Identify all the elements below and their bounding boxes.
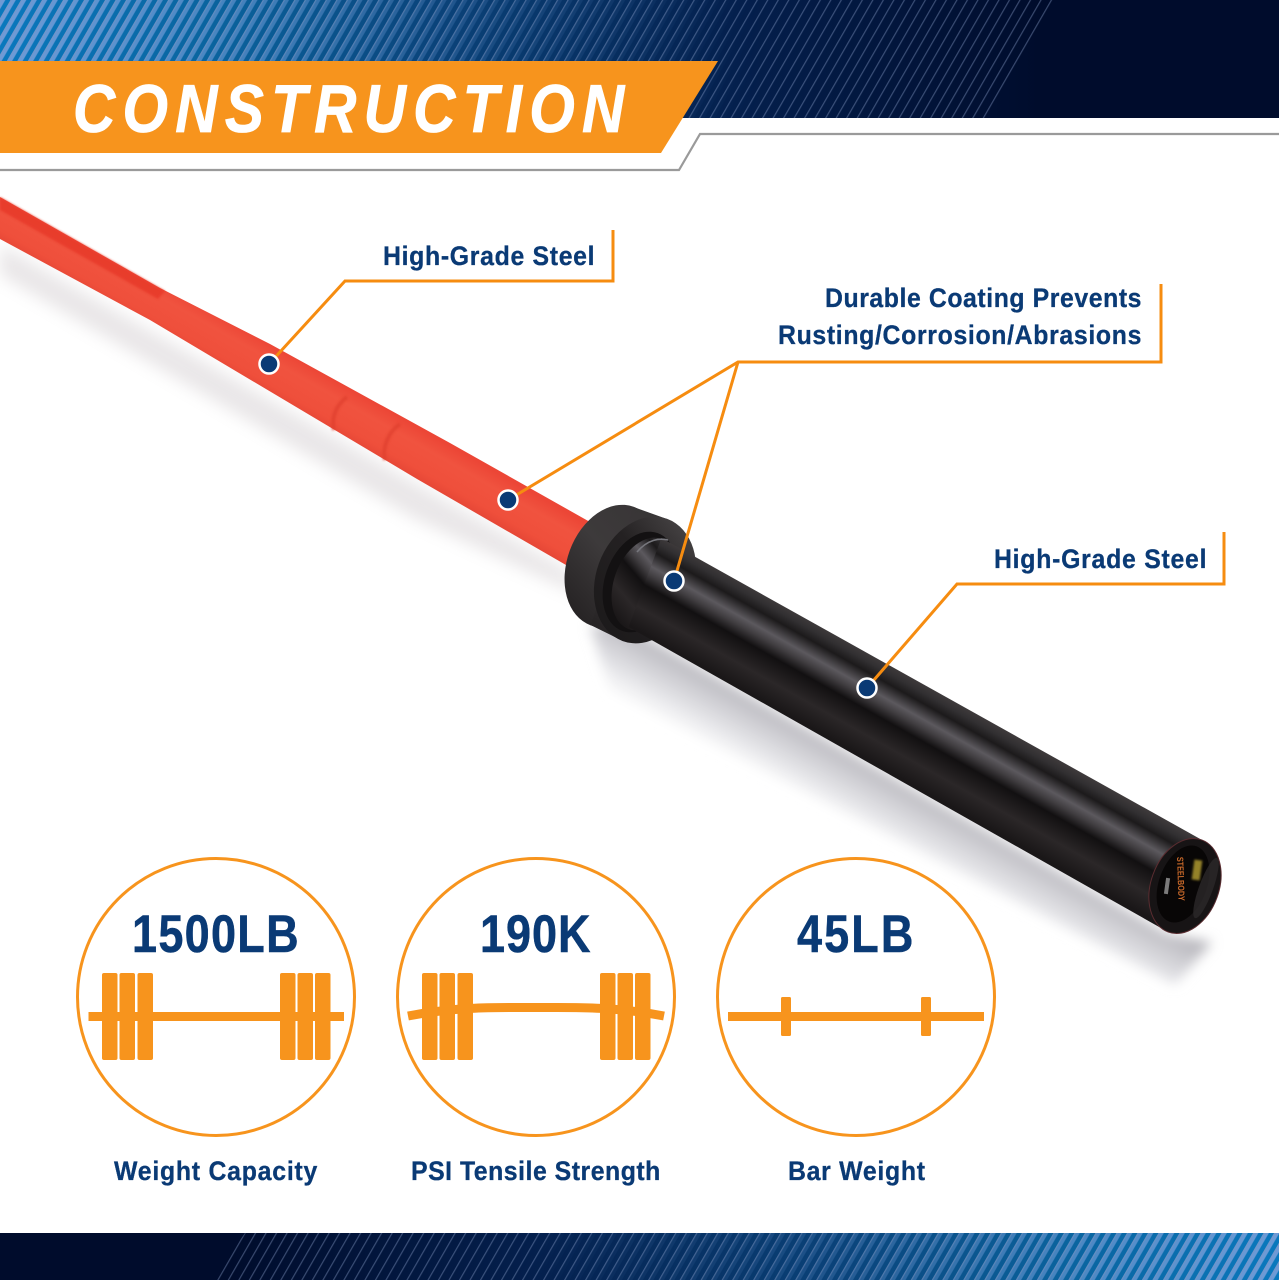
sleeve shadow bbox=[590, 625, 1212, 985]
value: 45LB bbox=[797, 905, 913, 964]
marker on shaft bbox=[498, 490, 518, 510]
sleeve end cap bbox=[1136, 828, 1234, 944]
label bbox=[778, 284, 1141, 350]
black sleeve bbox=[599, 528, 1202, 932]
marker bbox=[260, 354, 278, 374]
icon: empty bar bbox=[728, 997, 984, 1036]
value: 190K bbox=[480, 905, 591, 964]
title banner bbox=[0, 61, 718, 153]
collar bbox=[548, 491, 713, 658]
label: Rusting/Corrosion/Abrasions bbox=[778, 321, 1141, 350]
icon: bending loaded barbell bbox=[408, 973, 664, 1060]
label: High-Grade Steel bbox=[994, 545, 1207, 574]
knurl grooves bbox=[333, 397, 347, 430]
caption: Bar Weight bbox=[788, 1157, 925, 1186]
end cap lettering: STEELBODY bbox=[1175, 857, 1187, 901]
callout: durable coating bbox=[498, 284, 1161, 590]
caption: PSI Tensile Strength bbox=[411, 1157, 660, 1186]
stat: bar weight bbox=[718, 858, 994, 1186]
stat: tensile strength bbox=[398, 858, 674, 1186]
bottom striped banner bbox=[0, 1233, 1279, 1280]
label: Durable Coating Prevents bbox=[825, 284, 1141, 313]
title: CONSTRUCTION bbox=[73, 72, 625, 147]
stat: weight capacity bbox=[78, 858, 354, 1186]
label: High-Grade Steel bbox=[383, 242, 595, 271]
callout: high-grade steel, sleeve bbox=[858, 532, 1224, 698]
marker on sleeve bbox=[664, 572, 684, 590]
white page area under the banner step bbox=[0, 118, 1279, 170]
marker bbox=[858, 678, 876, 698]
barbell photo illustration bbox=[0, 197, 1234, 985]
value: 1500LB bbox=[132, 905, 299, 964]
callout: high-grade steel, shaft bbox=[260, 230, 613, 374]
icon: straight loaded barbell bbox=[88, 973, 344, 1060]
red shaft bbox=[0, 197, 590, 565]
shaft shadow bbox=[0, 244, 590, 600]
grey stepped rule bbox=[0, 134, 1279, 170]
top striped banner bbox=[0, 0, 1279, 118]
caption: Weight Capacity bbox=[114, 1157, 318, 1186]
